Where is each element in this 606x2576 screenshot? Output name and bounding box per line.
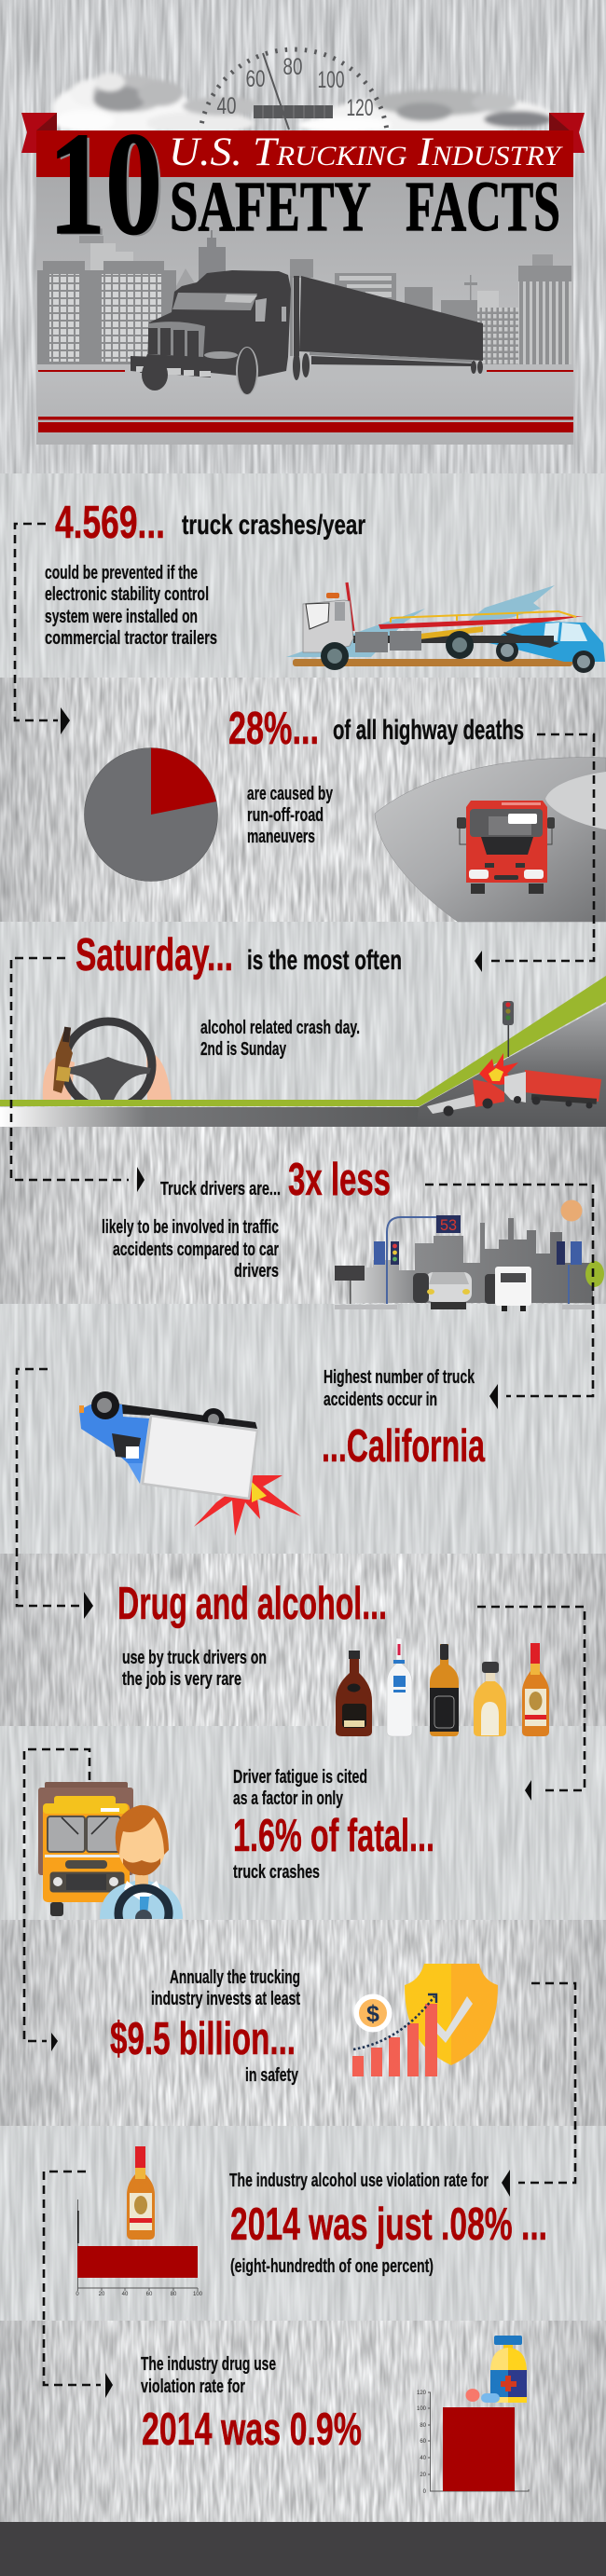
heading: 28%: 28%... xyxy=(228,704,319,754)
text block: Annually the trucking xyxy=(170,1966,300,1988)
text block xyxy=(324,1366,475,1410)
text block: alcohol related crash day. xyxy=(200,1017,360,1038)
text block xyxy=(45,562,217,649)
text block: could be prevented if the xyxy=(45,562,198,583)
bar chart: drugs: 0 xyxy=(423,2489,427,2495)
title: 10: 10 xyxy=(48,103,162,266)
arrow: dashed connector 8 to 9 xyxy=(502,1983,575,2197)
arrow: dashed connector 6 to 7 xyxy=(477,1607,585,1801)
arrow: dashed connector 5 to 6 xyxy=(17,1369,93,1619)
text block: accidents occur in xyxy=(324,1389,437,1410)
text block: industry invests at least xyxy=(151,1988,300,2009)
subheading: truck crashes/year xyxy=(182,510,365,541)
bar chart: alcohol: 60 xyxy=(146,2292,153,2297)
illustration: city traffic scene xyxy=(335,1200,604,1311)
text block: run-off-road xyxy=(247,804,324,826)
icon: shield, bars and coin xyxy=(352,1964,498,2076)
panel: fact 6 drug and alcohol xyxy=(0,1554,606,1736)
panel: fact 1 truck crashes xyxy=(0,473,606,678)
road curve xyxy=(375,758,606,922)
bar chart: drugs: 120 xyxy=(417,2391,427,2396)
panel: fact 8 9.5 billion xyxy=(0,1920,606,2126)
icon: yellow truck xyxy=(38,1782,133,1916)
heading: 4.569: 4.569... xyxy=(55,498,165,548)
text block: drivers xyxy=(234,1260,279,1281)
clouds xyxy=(52,73,552,136)
pie chart xyxy=(84,747,218,882)
icon: medicine bottle and pills xyxy=(466,2336,527,2403)
text block xyxy=(122,1647,267,1690)
text block: maneuvers xyxy=(247,826,315,847)
panel: fact 2 highway deaths xyxy=(0,678,606,922)
icon: tow truck with blue car xyxy=(286,582,605,673)
heading: 2014 was 0.9%: 2014 was 0.9% xyxy=(142,2405,362,2455)
text block: use by truck drivers on xyxy=(122,1647,267,1668)
city skyline xyxy=(37,230,572,364)
bar chart: drugs: 80 xyxy=(420,2423,427,2429)
arrow: dashed connector 4 to 5 xyxy=(425,1185,593,1409)
text block: accidents compared to car xyxy=(113,1239,279,1260)
text block xyxy=(151,1966,300,2009)
text block: system were installed on xyxy=(45,606,198,627)
text block: the job is very rare xyxy=(122,1668,241,1690)
heading: 1.6% of fatal: 1.6% of fatal... xyxy=(233,1811,434,1861)
speedometer gauge: 120 xyxy=(347,95,373,121)
heading: 3x less: 3x less xyxy=(288,1155,391,1205)
panel: header xyxy=(21,47,585,445)
text block: commercial tractor trailers xyxy=(45,627,217,649)
panel: fact 9 alcohol violation rate xyxy=(0,2126,606,2321)
arrow: dashed connector 3 to 4 xyxy=(11,958,145,1192)
speedometer gauge: 60 xyxy=(246,66,265,92)
text block xyxy=(247,783,333,847)
text block: likely to be involved in traffic xyxy=(102,1216,279,1238)
bar chart: drugs: 100 xyxy=(417,2406,427,2412)
text block: The industry drug use xyxy=(141,2353,276,2375)
text block: Driver fatigue is cited xyxy=(233,1766,367,1788)
panel: fact 3 Saturday xyxy=(0,922,606,1127)
panel: fact 5 California xyxy=(0,1304,606,1554)
arrow: dashed connector 9 to 10 xyxy=(44,2172,113,2398)
subheading: truck crashes xyxy=(233,1861,320,1883)
text block: are caused by xyxy=(247,783,333,804)
red ribbon xyxy=(21,113,585,177)
icon: overturned truck with burst xyxy=(79,1391,301,1536)
text block xyxy=(233,1766,367,1809)
bar chart: alcohol: 100 xyxy=(193,2292,203,2297)
bar chart: alcohol: 0 xyxy=(76,2292,79,2297)
text block: electronic stability control xyxy=(45,583,209,605)
bar chart: drugs: 20 xyxy=(420,2473,427,2478)
speedometer gauge: 100 xyxy=(317,67,345,93)
arrow: dashed connector 1 to 2 xyxy=(15,524,70,734)
heading: Saturday: Saturday... xyxy=(76,930,233,980)
text block: 2nd is Sunday xyxy=(200,1038,286,1060)
panel: fact 7 driver fatigue xyxy=(38,1769,433,1919)
icon: shield, bars and coin: $ xyxy=(366,2001,379,2027)
bar chart: drugs: 60 xyxy=(420,2439,427,2445)
heading: California: ...California xyxy=(322,1421,485,1472)
icon: traffic light xyxy=(503,1001,514,1057)
icon: crash of red pickup and red truck xyxy=(427,1053,601,1117)
header grey panel xyxy=(36,177,573,445)
title: Safety Facts: SAFETY xyxy=(170,168,371,246)
speedometer gauge: 80 xyxy=(283,54,302,80)
icon: bearded driver with steering wheel xyxy=(100,1804,183,1919)
footer bar xyxy=(0,2522,606,2576)
bar chart: drugs xyxy=(417,2391,529,2495)
icon: red truck front xyxy=(457,801,555,894)
text block xyxy=(102,1216,279,1281)
title: 10: 10 xyxy=(51,104,165,267)
icon: five liquor bottles xyxy=(336,1638,549,1736)
semi truck silhouette xyxy=(131,270,483,395)
bar chart: drugs: 40 xyxy=(420,2456,427,2461)
text block: as a factor in only xyxy=(233,1788,343,1809)
subheading: (eight-hundredth of one percent) xyxy=(230,2255,434,2277)
bar chart: alcohol: 40 xyxy=(122,2292,129,2297)
heading: 9.5 billion: $9.5 billion... xyxy=(110,2014,296,2064)
panel: fact 10 drug violation rate xyxy=(0,2321,606,2522)
icon: steering wheel with bottle and hands xyxy=(43,1021,172,1109)
panel: fact 4 three times less xyxy=(0,1127,606,1311)
text block: violation rate for xyxy=(141,2376,245,2397)
arrow: dashed connector 2 to 3 xyxy=(475,734,594,972)
subheading: is the most often xyxy=(247,945,402,976)
text block: Highest number of truck xyxy=(324,1366,475,1388)
bar chart: alcohol xyxy=(76,2199,203,2297)
bar chart: alcohol: 20 xyxy=(99,2292,105,2297)
road xyxy=(0,976,606,1127)
text block xyxy=(200,1017,360,1060)
subheading: Truck drivers are... xyxy=(160,1178,281,1199)
red road lines xyxy=(38,370,573,432)
heading: Drug and alcohol: Drug and alcohol... xyxy=(117,1579,387,1629)
speedometer gauge xyxy=(198,47,389,130)
text block xyxy=(141,2353,276,2397)
title: U.S. Trucking Industry: U.S. Trucking Industry xyxy=(169,130,564,174)
speedometer gauge: 40 xyxy=(216,93,237,119)
subheading: in safety xyxy=(245,2064,298,2086)
bar chart: alcohol: 80 xyxy=(171,2292,177,2297)
illustration: city traffic scene: 53 xyxy=(440,1216,457,1234)
arrow: dashed connector 7 to 8 xyxy=(24,1749,90,2051)
text block: The industry alcohol use violation rate for xyxy=(229,2170,489,2191)
icon: liquor bottle xyxy=(127,2146,155,2240)
